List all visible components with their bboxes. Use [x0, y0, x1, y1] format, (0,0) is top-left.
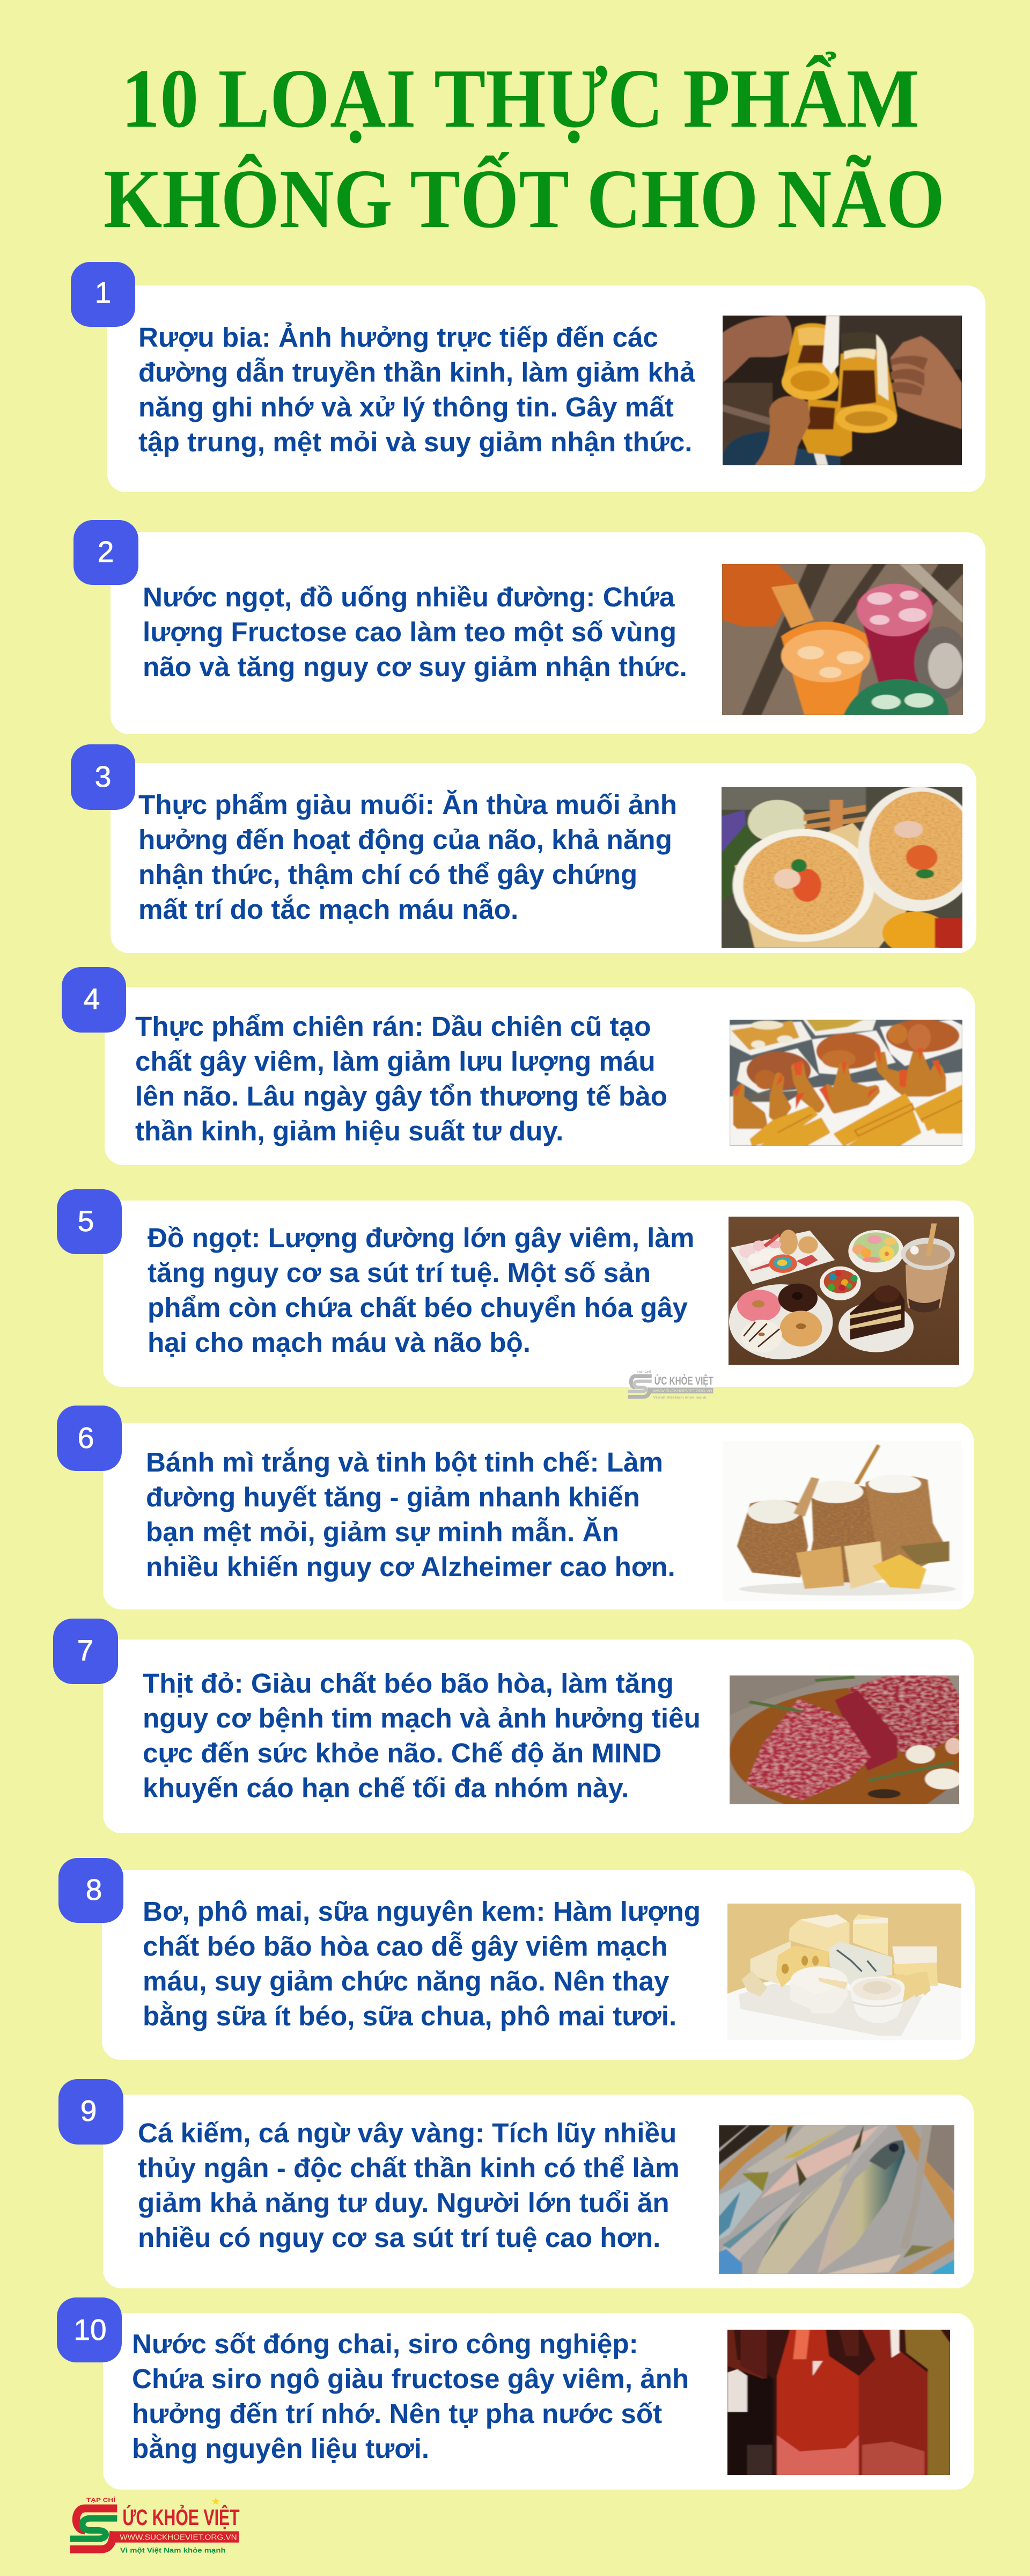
text block 9: Cá kiếm, cá ngừ vây vàng: Tích lũy nhiều — [138, 2118, 676, 2148]
panel: item 10 bottled sauces — [57, 2297, 974, 2490]
number badge 1 — [71, 262, 135, 327]
text block 8: máu, suy giảm chức năng não. Nên thay — [143, 1966, 670, 1996]
text block 9: giảm khả năng tư duy. Người lớn tuổi ăn — [138, 2187, 670, 2218]
number badge 6 — [57, 1406, 122, 1471]
number badge 9 — [58, 2079, 123, 2145]
text block 6: đường huyết tăng - giảm nhanh khiến — [146, 1482, 640, 1512]
panel: item 7 red meat — [53, 1619, 1019, 1833]
text block 3: Thực phẩm giàu muối: Ăn thừa muối ảnh — [138, 789, 677, 820]
watermark logo — [628, 1370, 713, 1400]
number badge 5 — [57, 1189, 122, 1254]
text block 9 — [138, 2118, 680, 2253]
panel: item 8 butter and cheese — [58, 1858, 975, 2060]
image: mackerel on ice in a wooden crate — [719, 2125, 954, 2274]
image: sacks of flour, bread and pasta — [736, 1444, 957, 1596]
number badge 10: 10 — [73, 2313, 107, 2346]
text block 5 — [148, 1223, 694, 1358]
number badge 10 — [57, 2297, 122, 2362]
text block 2: Nước ngọt, đồ uống nhiều đường: Chứa — [143, 582, 675, 612]
title: 10 LOẠI THỰC PHẨM — [121, 52, 919, 145]
text block 3: mất trí do tắc mạch máu não. — [138, 894, 518, 925]
text block 6 — [146, 1446, 675, 1582]
text block 9: thủy ngân - độc chất thần kinh có thể làm — [138, 2153, 680, 2183]
text block 2: não và tăng nguy cơ suy giảm nhận thức. — [143, 652, 687, 682]
text block 5: Đồ ngọt: Lượng đường lớn gây viêm, làm — [148, 1223, 694, 1253]
panel: item 5 sweets — [57, 1189, 974, 1400]
spring rolls — [751, 1086, 962, 1146]
image: fried shrimp and spring rolls — [730, 1020, 962, 1146]
number badge 9: 9 — [80, 2094, 97, 2127]
text block 1: năng ghi nhớ và xử lý thông tin. Gây mất — [138, 392, 674, 422]
watermark logo: ỨC KHỎE VIỆT — [654, 1374, 713, 1387]
text block 2: lượng Fructose cao làm teo một số vùng — [143, 617, 676, 647]
number badge 4 — [62, 967, 126, 1033]
image: cheese board — [727, 1904, 961, 2036]
text block 10: bằng nguyên liệu tươi. — [132, 2433, 429, 2464]
panel: item 9 mercury fish — [58, 2079, 974, 2288]
text block 3: hưởng đến hoạt động của não, khả năng — [138, 824, 672, 855]
shrimp — [733, 1052, 946, 1129]
number badge 1: 1 — [95, 276, 111, 309]
text block 8 — [143, 1896, 701, 2031]
panel: item 6 white bread and refined starch — [57, 1406, 974, 1609]
text block 8: Bơ, phô mai, sữa nguyên kem: Hàm lượng — [143, 1896, 701, 1927]
text block 6: bạn mệt mỏi, giảm sự minh mẫn. Ăn — [146, 1517, 619, 1547]
text block 5: hại cho mạch máu và não bộ. — [148, 1327, 531, 1358]
image: bottles of sauce — [727, 2330, 950, 2475]
panel: item 1 alcohol — [71, 262, 985, 492]
text block 1: Rượu bia: Ảnh hưởng trực tiếp đến các — [138, 321, 658, 353]
image: clinking beer mugs — [723, 316, 962, 465]
watermark logo: TẠP CHÍ — [636, 1370, 651, 1374]
number badge 7 — [53, 1619, 118, 1684]
image: instant noodle bowls — [722, 787, 962, 948]
text block 8: bằng sữa ít béo, sữa chua, phô mai tươi. — [143, 2000, 676, 2031]
logo: Sức Khỏe Việt magazine: WWW.SUCKHOEVIET.ORG.VN — [120, 2534, 237, 2542]
image: sweets, donuts, cake and milk tea — [729, 1217, 959, 1365]
text block 9: nhiều có nguy cơ sa sút trí tuệ cao hơn. — [138, 2222, 660, 2253]
image: iced sweet drinks — [722, 564, 963, 715]
text block 6: Bánh mì trắng và tinh bột tinh chế: Làm — [146, 1446, 663, 1477]
watermark logo: WWW.SUCKHOEVIET.ORG.VN — [653, 1388, 712, 1393]
text block 4: Thực phẩm chiên rán: Dầu chiên cũ tạo — [135, 1011, 651, 1042]
text block 8: chất béo bão hòa cao dễ gây viêm mạch — [143, 1931, 668, 1962]
number badge 3 — [71, 744, 135, 810]
text block 10: Nước sốt đóng chai, siro công nghiệp: — [132, 2329, 638, 2359]
logo: Sức Khỏe Việt magazine: ỨC KHỎE VIỆT — [122, 2504, 240, 2530]
number badge 4: 4 — [84, 982, 100, 1015]
image: raw red meat on wooden plate — [730, 1675, 959, 1804]
text block 3 — [138, 789, 677, 925]
text block 7: nguy cơ bệnh tim mạch và ảnh hưởng tiêu — [143, 1703, 701, 1733]
text block 4: chất gây viêm, làm giảm lưu lượng máu — [135, 1046, 656, 1077]
text block 5: phẩm còn chứa chất béo chuyển hóa gây — [148, 1292, 688, 1323]
panel: item 2 sugary drinks — [73, 520, 985, 734]
text block 10: hưởng đến trí nhớ. Nên tự pha nước sốt — [132, 2398, 662, 2429]
number badge 5: 5 — [78, 1204, 94, 1238]
text block 7: cực đến sức khỏe não. Chế độ ăn MIND — [143, 1738, 661, 1768]
text block 4: thần kinh, giảm hiệu suất tư duy. — [135, 1116, 563, 1146]
text block 3: nhận thức, thậm chí có thể gây chứng — [138, 859, 637, 890]
number badge 7: 7 — [77, 1634, 93, 1667]
text block 2 — [143, 582, 687, 682]
logo: Sức Khỏe Việt magazine: Vì một Việt Nam khỏe mạnh — [120, 2547, 226, 2555]
text block 5: tăng nguy cơ sa sút trí tuệ. Một số sản — [148, 1257, 651, 1288]
text block 1: đường dẫn truyền thần kinh, làm giảm khả — [138, 357, 695, 387]
number badge 6: 6 — [78, 1421, 94, 1454]
watermark logo: Vì một Việt Nam khỏe mạnh — [653, 1396, 707, 1400]
text block 1: tập trung, mệt mỏi và suy giảm nhận thức. — [138, 427, 693, 457]
text block 7: Thịt đỏ: Giàu chất béo bão hòa, làm tăng — [143, 1668, 674, 1699]
text block 10 — [132, 2329, 689, 2464]
number badge 2 — [73, 520, 138, 585]
text block 7 — [143, 1668, 701, 1803]
logo: Sức Khỏe Việt magazine: TẠP CHÍ — [86, 2497, 116, 2504]
panel: item 3 salty foods — [71, 744, 979, 954]
text block 4 — [135, 1011, 667, 1146]
title: KHÔNG TỐT CHO NÃO — [104, 152, 945, 245]
text block 6: nhiều khiến nguy cơ Alzheimer cao hơn. — [146, 1552, 675, 1582]
text block 1 — [138, 321, 695, 457]
text block 7: khuyến cáo hạn chế tối đa nhóm này. — [143, 1773, 629, 1803]
number badge 2: 2 — [98, 535, 114, 568]
text block 10: Chứa siro ngô giàu fructose gây viêm, ảnh — [132, 2363, 689, 2394]
number badge 8 — [58, 1858, 123, 1923]
number badge 3: 3 — [95, 760, 111, 793]
text block 4: lên não. Lâu ngày gây tổn thương tế bào — [135, 1081, 667, 1111]
panel: item 4 fried foods — [62, 967, 975, 1165]
title — [104, 52, 945, 245]
logo: Sức Khỏe Việt magazine — [70, 2497, 240, 2555]
number badge 8: 8 — [86, 1873, 102, 1906]
